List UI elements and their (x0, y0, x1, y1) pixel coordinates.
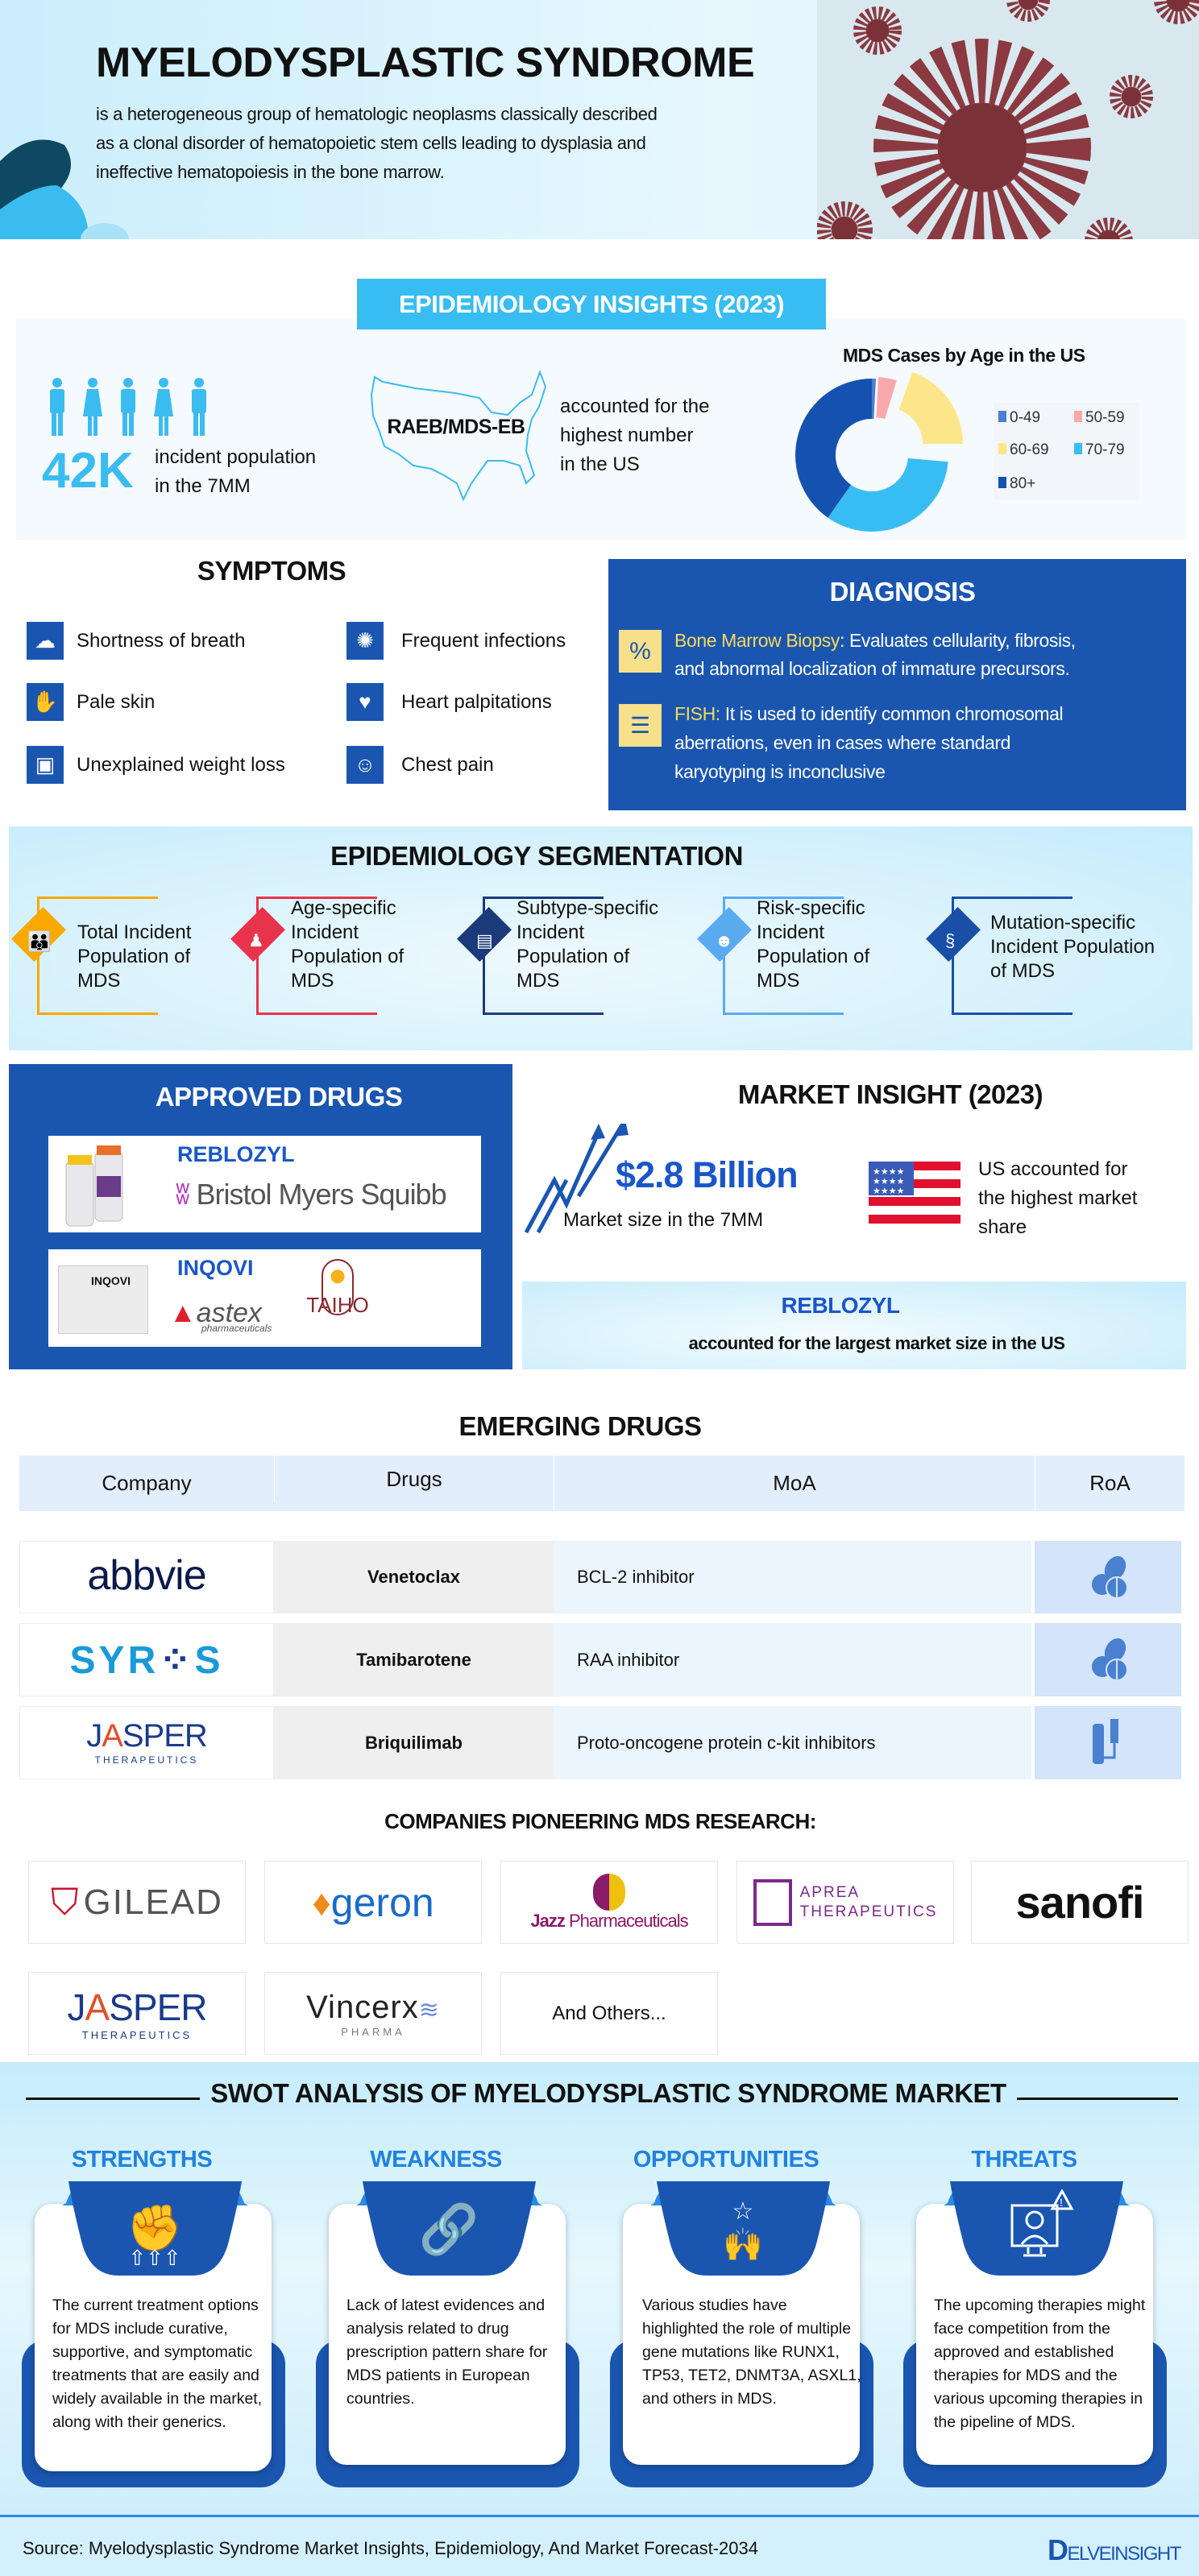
icon: people (50, 378, 206, 436)
item: risk-specific: Risk-specific (757, 897, 865, 919)
symptoms list: Heart palpitations (401, 691, 552, 713)
icon: US flag (869, 1162, 960, 1224)
card: threats: ! (1060, 2196, 1063, 2209)
icon: shortness of breath (27, 622, 64, 660)
icon: weight loss: ▣ (35, 752, 55, 777)
item: age-specific (230, 897, 405, 1015)
icon: shortness of breath: ☁ (35, 628, 56, 652)
card: weakness: 🔗 (419, 2202, 479, 2256)
symptoms list (27, 622, 566, 784)
row: jasper: Proto-oncogene protein c-kit inhibitors (577, 1733, 876, 1753)
row: abbvie: Venetoclax (367, 1567, 460, 1587)
icon: US flag: ★★★★ (873, 1177, 905, 1187)
item: risk-specific: Population of (757, 946, 869, 967)
item: risk-specific (697, 897, 870, 1015)
text: OPPORTUNITIES (633, 2147, 819, 2172)
table header: MoA (773, 1471, 816, 1495)
approved drugs heading: APPROVED DRUGS (156, 1082, 402, 1112)
item: subtype-specific: MDS (517, 970, 559, 992)
logo: geron (264, 1861, 482, 1944)
logo: vincerx: PHARMA (341, 2025, 405, 2038)
card: opportunities (610, 2181, 873, 2487)
logo: jazz: Jazz Pharmaceuticals (530, 1911, 688, 1930)
virus image (817, 0, 1199, 239)
logo: jasper (28, 1972, 246, 2055)
swot headers: STRENGTHS (72, 2147, 212, 2172)
epidemiology insights heading: EPIDEMIOLOGY INSIGHTS (2023) (399, 290, 784, 318)
row: abbvie: BCL-2 inhibitor (577, 1567, 695, 1587)
card: threats: The upcoming therapies might face competition from the approved and established therapies for MDS and the various upcoming therapies in the pipeline of MDS. (934, 2296, 1145, 2431)
item: subtype-specific (457, 897, 658, 1015)
row: jasper: Briquilimab (365, 1733, 463, 1753)
swot title (26, 2078, 1178, 2108)
logo: sanofi: sanofi (1016, 1877, 1143, 1928)
decorative blobs (0, 139, 129, 239)
logo: jasper: THERAPEUTICS (82, 2029, 192, 2041)
row: jasper: THERAPEUTICS (95, 1754, 198, 1766)
chart legend: 50-59 (1085, 409, 1125, 426)
epidemiology insights heading (357, 279, 826, 329)
icon: US flag: ★★★★ (873, 1167, 905, 1177)
icon: chest pain: ☺ (355, 752, 375, 777)
text: accounted for highest: accounted for the (560, 396, 709, 417)
symptoms heading: SYMPTOMS (197, 556, 346, 586)
logo: sanofi (971, 1861, 1189, 1944)
card: inqovi (48, 1249, 481, 1347)
logo: aprea: THERAPEUTICS (800, 1903, 937, 1920)
icon: chest pain (346, 746, 384, 784)
logo: bristol myers squibb: ʬ Bristol Myers Squibb (176, 1178, 446, 1211)
description: as a clonal disorder of hematopoietic stem cells leading to dysplasia and (96, 133, 646, 153)
card: strengths: ⇧⇧⇧ (128, 2246, 181, 2270)
card: inqovi: INQOVI (91, 1274, 131, 1287)
logo: gilead (28, 1861, 246, 1944)
card: threats (903, 2181, 1167, 2487)
text: and others (500, 1972, 718, 2055)
card: opportunities: 🙌 (723, 2227, 763, 2263)
item: mutation-specific: Mutation-specific (990, 912, 1135, 934)
table header (19, 1456, 1184, 1511)
logo: jazz (500, 1861, 718, 1944)
card: weakness (316, 2181, 579, 2487)
card: opportunities: Various studies have highlighted the role of multiple gene mutations like RUNX1, TP53, TET2, DNMT3A, ASXL1, and others in MDS. (642, 2296, 861, 2408)
logo: astex: ▲astex (169, 1298, 262, 1328)
table header: Company (102, 1471, 192, 1495)
footer (0, 2515, 1199, 2576)
icon: heart palpitations: ♥ (359, 690, 371, 714)
logo: geron: geron (331, 1880, 434, 1925)
text: accounted for highest (560, 396, 709, 475)
item: risk-specific: ☻ (715, 930, 733, 950)
text: WEAKNESS (370, 2147, 502, 2172)
item: subtype-specific: Population of (517, 946, 629, 967)
text: US share (978, 1158, 1138, 1238)
logo: vincerx: Vincerx≋ (306, 1990, 440, 2025)
logo: aprea: APREA (800, 1883, 860, 1901)
chart legend (994, 403, 1139, 499)
callout: reblozyl largest: REBLOZYL (782, 1293, 899, 1318)
icon: US flag: ★★★★ (873, 1187, 905, 1196)
item: subtype-specific: ▤ (476, 930, 493, 950)
emerging drugs heading: EMERGING DRUGS (458, 1411, 702, 1441)
text: FISH: aberrations, even in cases where standard (674, 732, 1010, 753)
logo: jasper: JASPER (68, 1986, 206, 2028)
market size block (524, 1124, 798, 1234)
text: accounted for highest: in the US (560, 453, 640, 475)
description: ineffective hematopoiesis in the bone marrow. (96, 162, 444, 182)
symptoms list: Frequent infections (401, 630, 566, 652)
table: emerging drugs (19, 1456, 1184, 1779)
swot title: SWOT ANALYSIS OF MYELODYSPLASTIC SYNDROME MARKET (210, 2078, 1006, 2108)
row: syros: RAA inhibitor (577, 1650, 679, 1670)
card: strengths: ✊ (127, 2202, 183, 2253)
icon: heart palpitations (346, 683, 384, 721)
stat: 42K: 42K (42, 443, 134, 499)
stat: $2.8 billion: $2.8 Billion (616, 1154, 798, 1195)
item: mutation-specific (926, 897, 1155, 1015)
text: bone marrow biopsy: and abnormal localization of immature precursors. (674, 658, 1069, 679)
text: FISH: karyotyping is inconclusive (674, 761, 885, 782)
table header: Drugs (386, 1467, 442, 1491)
card: opportunities: ☆ (732, 2198, 753, 2225)
item: subtype-specific: Incident (517, 921, 584, 943)
text: incident population: in the 7MM (155, 475, 251, 497)
text: THREATS (971, 2147, 1077, 2172)
item: mutation-specific: § (945, 930, 955, 950)
symptoms list: Unexplained weight loss (77, 754, 285, 776)
market size block: Market size in the 7MM (563, 1209, 763, 1231)
text: US share: the highest market (978, 1187, 1137, 1209)
icon: infections: ✺ (356, 628, 374, 652)
chart legend: 80+ (1010, 475, 1035, 492)
item: total: 👪 (27, 931, 52, 953)
symptoms list: Pale skin (77, 691, 155, 713)
logo: geron: ♦ (312, 1882, 331, 1924)
row: jasper: JASPER (86, 1718, 207, 1754)
item: risk-specific: MDS (757, 970, 799, 992)
text: FISH (674, 703, 1063, 782)
logo: vincerx (264, 1972, 482, 2055)
chart legend: 60-69 (1010, 441, 1049, 458)
header banner (0, 0, 1199, 239)
item: risk-specific: Incident (757, 921, 824, 943)
logo: aprea (736, 1861, 954, 1944)
panel: diagnosis (608, 559, 1186, 810)
card: weakness: Lack of latest evidences and analysis related to drug prescription pattern share for MDS patients in European countries. (346, 2296, 547, 2408)
callout: reblozyl largest: accounted for the largest market size in the US (689, 1333, 1064, 1353)
logo: taiho: TAIHO (306, 1293, 369, 1317)
logo: astex: pharmaceuticals (201, 1323, 272, 1334)
icon: biopsy: % (629, 638, 651, 665)
chart legend: 70-79 (1085, 441, 1125, 458)
icon: FISH: ☰ (630, 713, 650, 738)
map: US outline (371, 371, 546, 501)
row: jasper (19, 1706, 1181, 1779)
companies heading: COMPANIES PIONEERING MDS RESEARCH: (384, 1809, 816, 1833)
donut chart (795, 372, 963, 532)
card: reblozyl (48, 1136, 481, 1232)
icon: infections (346, 622, 384, 660)
icon: FISH (619, 704, 662, 747)
text: FISH: FISH: It is used to identify common chromosomal (674, 703, 1063, 724)
text: US share: share (978, 1216, 1027, 1238)
icon: weight loss (27, 746, 64, 784)
item: total: Total Incident Population of MDS (77, 921, 191, 992)
row: abbvie (19, 1541, 1181, 1613)
item: mutation-specific: Incident Population (990, 936, 1155, 958)
callout: reblozyl largest (522, 1282, 1186, 1369)
row: syros: SYR⁘S (70, 1639, 223, 1682)
logo grid (28, 1861, 1189, 2055)
symptoms list: Chest pain (401, 754, 494, 776)
symptoms list: Shortness of breath (77, 630, 245, 652)
row: syros: Tamibarotene (356, 1650, 471, 1670)
item: age-specific: Age-specific Incident Population of MDS (291, 897, 404, 992)
item: mutation-specific: of MDS (990, 960, 1055, 982)
text: and others: And Others... (552, 2002, 666, 2023)
icon: pale skin: ✋ (32, 690, 58, 714)
title: MYELODYSPLASTIC SYNDROME (96, 39, 754, 86)
segmentation heading: EPIDEMIOLOGY SEGMENTATION (330, 841, 743, 871)
card: reblozyl: REBLOZYL (177, 1142, 295, 1166)
item: subtype-specific: Subtype-specific (517, 897, 658, 919)
row: abbvie: abbvie (87, 1552, 206, 1599)
card: strengths: The current treatment options for MDS include curative, supportive, and symptomatic treatments that are easily and widely available in the market, along with their generics. (52, 2296, 262, 2431)
table header: RoA (1089, 1471, 1131, 1495)
text: accounted for highest: highest number (560, 425, 693, 446)
panel: epidemiology segmentation (9, 826, 1193, 1050)
logo: gilead: GILEAD (84, 1882, 223, 1922)
chart title: MDS Cases by Age in the US (843, 345, 1085, 366)
epidemiology panel background (16, 318, 1186, 540)
chart legend: 0-49 (1010, 409, 1040, 426)
text: RAEB/MDS-EB: RAEB/MDS-EB (388, 416, 525, 438)
diagnosis heading: DIAGNOSIS (830, 577, 975, 607)
logo: gilead: ⛉ (51, 1880, 79, 1922)
market insight heading: MARKET INSIGHT (2023) (738, 1079, 1043, 1109)
text: bone marrow biopsy: Bone Marrow Biopsy: Evaluates cellularity, fibrosis, (674, 630, 1076, 651)
source text: Source: Myelodysplastic Syndrome Market Insights, Epidemiology, And Market Forecast-2034 (23, 2538, 758, 2558)
text: US share: US accounted for (978, 1158, 1127, 1180)
description: is a heterogeneous group of hematologic neoplasms classically described (96, 104, 658, 124)
item: total (11, 897, 192, 1015)
icon: growth arrows (524, 1124, 629, 1234)
vials (66, 1145, 122, 1226)
panel: swot (0, 2062, 1199, 2576)
icon: biopsy (619, 630, 662, 673)
text: incident population: incident population (155, 446, 316, 468)
text: bone marrow biopsy (674, 630, 1076, 679)
panel: approved drugs (9, 1064, 512, 1369)
card: strengths (22, 2181, 285, 2487)
item: age-specific: ♟ (248, 930, 264, 950)
card: inqovi: INQOVI (177, 1256, 254, 1280)
text: incident population (155, 446, 316, 497)
icon: pale skin (27, 683, 64, 721)
description (96, 104, 658, 182)
row: syros (19, 1623, 1181, 1696)
logo: taiho (306, 1259, 369, 1317)
logo: delveinsight: DELVEINSIGHT (1048, 2533, 1180, 2566)
